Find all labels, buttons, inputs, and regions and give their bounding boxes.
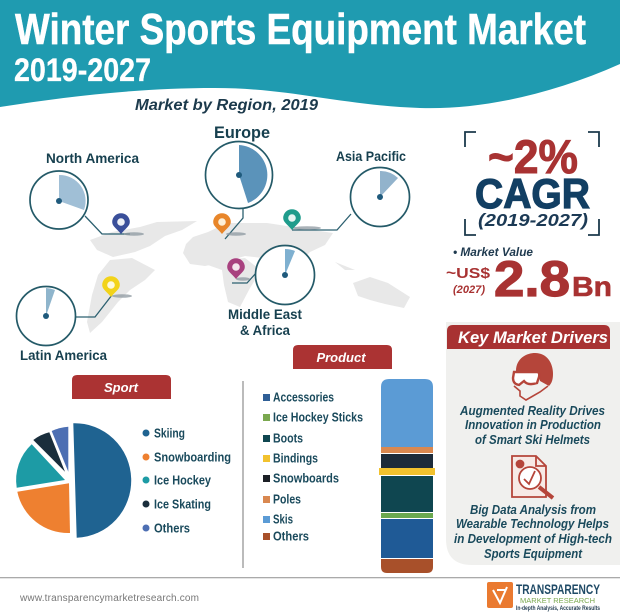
logo (487, 581, 601, 612)
market value callout: 2.8 (494, 251, 570, 307)
pin: asia pacific (283, 209, 301, 230)
label: asia pacific: Asia Pacific (336, 148, 406, 164)
CAGR callout: (2019-2027) (478, 210, 588, 230)
product legend: Others (273, 528, 309, 544)
product legend: Snowboards (273, 470, 339, 486)
CAGR callout: ~2% (488, 130, 578, 183)
icon: data analysis document (512, 456, 553, 498)
footer rule (0, 577, 620, 578)
sport legend: Snowboarding (154, 450, 231, 464)
sport legend: Ice Skating (154, 496, 211, 512)
pin: europe (213, 213, 231, 234)
CAGR brackets (465, 132, 599, 235)
pie: asia pacific (350, 168, 410, 226)
label: middle east and africa (228, 306, 302, 338)
divider (242, 381, 244, 568)
product legend: Skis (273, 512, 293, 526)
sport legend: Skiing (154, 426, 185, 440)
market value callout (446, 245, 612, 307)
panel: key market drivers (446, 322, 620, 565)
driver text 1: Augmented Reality Drives (459, 403, 605, 418)
icon: ski helmet (513, 353, 553, 400)
pie chart: sport (16, 423, 131, 538)
pie: latin america (16, 286, 76, 346)
CAGR callout: CAGR (475, 170, 590, 217)
driver text 1: Innovation in Production (465, 417, 601, 432)
product legend: Accessories (273, 390, 334, 404)
label: latin america: Latin America (20, 347, 107, 363)
driver text 1 (459, 403, 605, 447)
sport legend: Ice Hockey (154, 472, 212, 488)
sport legend: Others (154, 520, 190, 536)
label: europe: Europe (214, 123, 270, 142)
driver text 2: Sports Equipment (484, 546, 583, 561)
logo: In-depth Analysis, Accurate Results (516, 606, 601, 612)
product legend: Poles (273, 492, 301, 506)
pie: europe (206, 142, 272, 208)
stacked bar: product (379, 379, 435, 573)
product legend: Ice Hockey Sticks (273, 410, 363, 424)
driver text 2: Big Data Analysis from (470, 502, 596, 517)
logo: MARKET RESEARCH (520, 598, 595, 605)
product legend (263, 390, 363, 544)
panel heading: Key Market Drivers (458, 328, 608, 347)
pin: latin america (102, 276, 120, 297)
leader lines (75, 208, 351, 317)
product heading (293, 345, 392, 369)
label: middle east and africa: & Africa (240, 322, 290, 338)
market value callout: (2027) (453, 284, 485, 296)
market value callout: ~US$ (446, 265, 491, 282)
label: north america: North America (46, 150, 139, 166)
pin: north america (112, 213, 130, 234)
heading: market by region: Market by Region, 2019 (135, 97, 318, 114)
pie: north america (30, 171, 88, 229)
driver text 2 (454, 502, 612, 561)
CAGR callout (475, 130, 590, 230)
pin shadows (112, 226, 321, 298)
product legend: Boots (273, 430, 303, 446)
sport legend (142, 426, 231, 536)
sport heading (72, 375, 171, 399)
market value callout: • Market Value (453, 245, 533, 259)
pie: middle east and africa (256, 246, 314, 304)
website url: www.transparencymarketresearch.com (19, 593, 199, 604)
label: middle east and africa: Middle East (228, 306, 302, 322)
market value callout: Bn (572, 271, 612, 302)
product heading: Product (316, 350, 366, 365)
product legend: Bindings (273, 450, 318, 466)
pin: middle east and africa (227, 258, 245, 279)
title (14, 5, 586, 88)
header banner (0, 0, 620, 108)
sport heading: Sport (104, 380, 139, 395)
driver text 1: of Smart Ski Helmets (475, 432, 590, 447)
world map (87, 221, 410, 333)
title: 2019-2027 (14, 52, 151, 88)
